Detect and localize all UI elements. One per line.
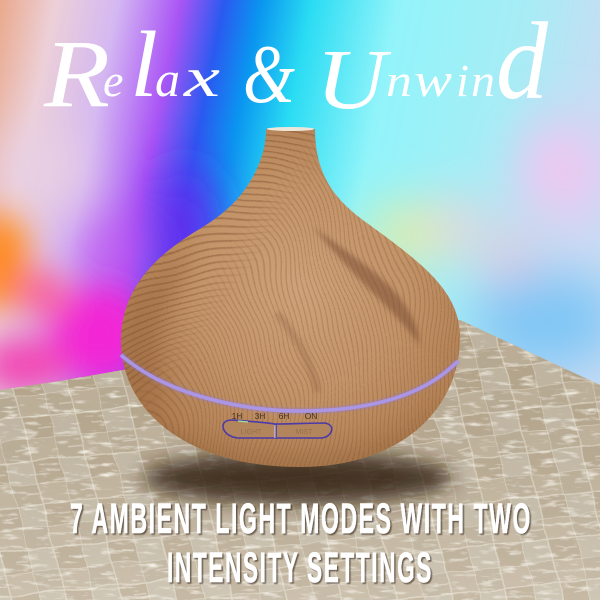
light ring [121,355,458,411]
wood grain [121,129,460,467]
darker left lobe and lower edge shading [123,260,186,398]
control buttons: MIST [296,429,313,436]
title: Relax & Unwind: U [316,31,392,127]
diffuser top opening [266,127,314,131]
title: Relax & Unwind: e [103,55,123,106]
title: Relax & Unwind: R [43,20,110,127]
title: Relax & Unwind: n [471,55,495,106]
dark knot streak [313,227,420,345]
timer labels [232,411,317,421]
timer labels: 3H [255,411,265,421]
control buttons: LIGHT [241,429,262,436]
table: mother of pearl mosaic [0,310,600,600]
title: Relax & Unwind: w [414,54,452,107]
timer labels: ON [305,411,317,421]
timer labels: 6H [279,411,289,421]
diffuser [119,127,460,467]
title: Relax & Unwind: a [155,51,180,107]
title: Relax & Unwind: d [496,0,549,122]
title: Relax & Unwind: n [386,55,412,106]
control buttons [223,420,332,438]
shadow under diffuser [143,452,453,504]
title: Relax & Unwind: x [183,47,220,109]
title: Relax & Unwind: & [243,28,296,121]
title: Relax & Unwind [43,0,549,127]
title: Relax & Unwind: l [130,13,158,117]
title: Relax & Unwind: i [456,55,469,106]
caption [70,495,532,592]
timer labels: 1H [232,411,242,421]
diffuser body [121,129,460,467]
